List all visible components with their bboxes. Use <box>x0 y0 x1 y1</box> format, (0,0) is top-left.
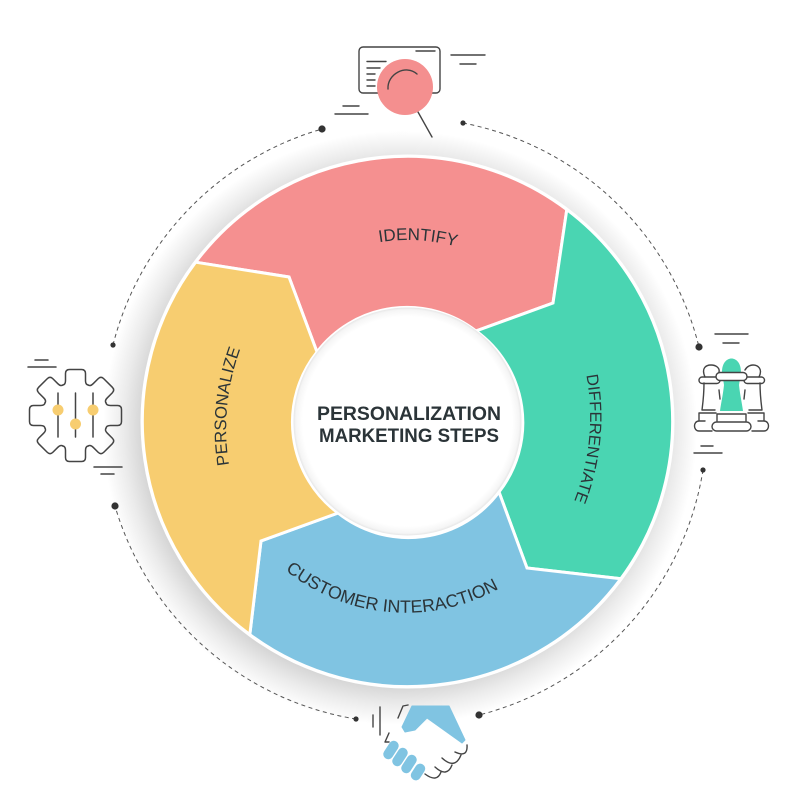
label: identify: IDENTIFY <box>379 228 458 246</box>
left pawn <box>702 365 720 410</box>
segment: customer interaction <box>250 492 621 687</box>
ring white base <box>140 154 674 688</box>
title <box>317 403 501 447</box>
icon: chess pieces <box>694 334 768 453</box>
ring shadow <box>103 131 697 725</box>
label: personalize: PERSONALIZE <box>214 346 240 466</box>
icon: magnifier over card <box>335 47 485 137</box>
segment: identify <box>196 156 567 352</box>
title: MARKETING STEPS <box>319 425 499 447</box>
icon: handshake <box>373 705 467 782</box>
center circle <box>294 308 522 536</box>
cycle diagram <box>142 156 673 687</box>
dashed connector arcs <box>113 123 703 719</box>
right pawn <box>744 365 762 410</box>
segment: personalize <box>142 262 338 635</box>
center pawn <box>720 358 743 411</box>
icon: gear with sliders <box>28 360 122 474</box>
label: customer interaction: CUSTOMER INTERACTION <box>288 563 498 613</box>
connector end dots <box>110 120 706 722</box>
segment: differentiate <box>476 210 673 579</box>
label: differentiate: DIFFERENTIATE <box>574 374 602 504</box>
title: PERSONALIZATION <box>317 403 501 425</box>
